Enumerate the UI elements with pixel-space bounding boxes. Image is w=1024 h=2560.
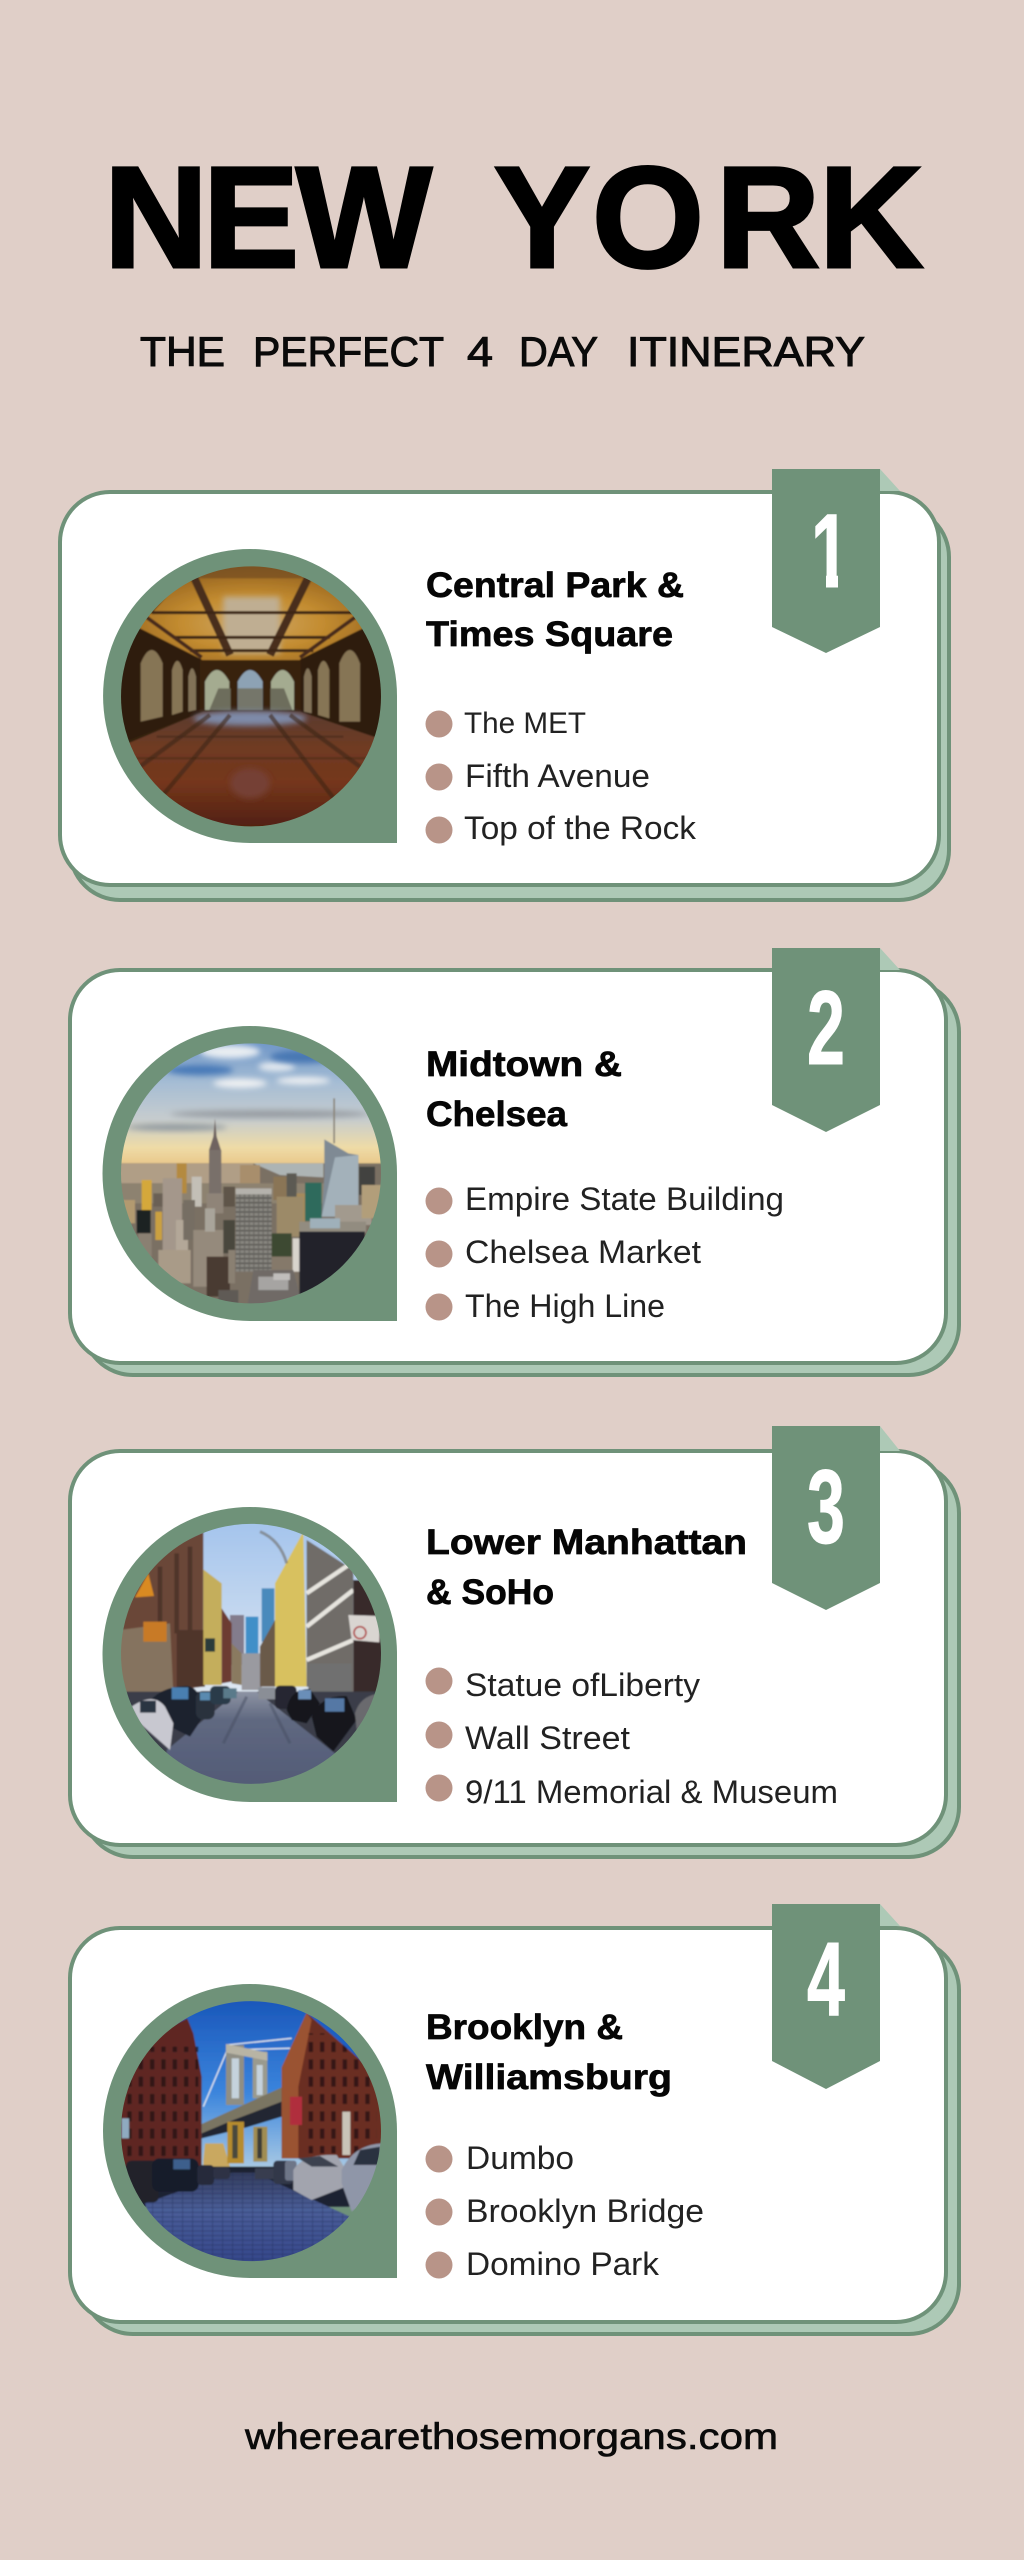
heading — [426, 566, 684, 654]
card — [70, 1451, 946, 1845]
card shadow — [83, 1940, 959, 2334]
panel: day 1 — [60, 469, 949, 900]
subtitle: DAY — [519, 328, 598, 375]
subtitle: PERFECT — [253, 328, 444, 375]
ribbon fold — [880, 1904, 900, 1926]
heading: Brooklyn & — [426, 2008, 623, 2047]
photo: Manhattan Bridge from Dumbo — [120, 2000, 383, 2265]
list: Wall Street — [465, 1720, 630, 1756]
heading: Times Square — [426, 615, 673, 654]
list: Domino Park — [466, 2246, 660, 2282]
list: Brooklyn Bridge — [466, 2193, 704, 2229]
card shadow — [83, 1463, 959, 1857]
title: NEW — [104, 137, 432, 298]
panel: day 3 — [70, 1426, 959, 1857]
heading: Lower Manhattan — [426, 1523, 747, 1562]
ribbon badge — [772, 948, 880, 1132]
photo: Bethesda Terrace arcade — [120, 563, 383, 830]
heading — [426, 2008, 672, 2097]
list — [426, 1667, 838, 1810]
list — [426, 1181, 784, 1324]
list: Top of the Rock — [464, 810, 697, 846]
heading: Williamsburg — [426, 2058, 672, 2097]
day number: 1 — [811, 492, 849, 610]
title — [104, 137, 923, 298]
heading: Central Park & — [426, 566, 684, 605]
card shadow — [70, 507, 949, 900]
title: YORK — [494, 137, 923, 298]
list: The High Line — [465, 1288, 665, 1324]
list — [426, 2140, 704, 2282]
ribbon fold — [880, 948, 900, 970]
list: Empire State Building — [465, 1181, 784, 1217]
heading: & SoHo — [426, 1573, 554, 1612]
subtitle: 4 — [467, 328, 493, 375]
footer website: wherearethosemorgans.com — [244, 2416, 778, 2457]
heading — [426, 1045, 622, 1134]
list: Dumbo — [466, 2140, 574, 2176]
heading — [426, 1523, 747, 1612]
panel: day 2 — [70, 948, 959, 1375]
day number: 3 — [807, 1448, 845, 1566]
number foot mask — [808, 575, 856, 592]
list: Chelsea Market — [465, 1234, 701, 1270]
ribbon badge — [772, 1426, 880, 1610]
photo: SoHo street — [120, 1522, 383, 1788]
heading: Chelsea — [426, 1095, 568, 1134]
panel: day 4 — [70, 1904, 959, 2334]
card — [70, 970, 946, 1363]
list: Statue ofLiberty — [465, 1667, 700, 1703]
card shadow — [83, 982, 959, 1375]
subtitle: ITINERARY — [627, 328, 865, 375]
list: The MET — [464, 707, 586, 740]
card — [60, 492, 939, 885]
subtitle — [140, 328, 865, 375]
subtitle: THE — [140, 328, 225, 375]
photo frame — [103, 1026, 397, 1321]
photo: Midtown skyline — [120, 1043, 383, 1310]
list — [426, 707, 697, 846]
ribbon badge — [772, 469, 880, 653]
list: Fifth Avenue — [465, 758, 650, 794]
card — [70, 1928, 946, 2322]
list: 9/11 Memorial & Museum — [465, 1774, 838, 1810]
photo frame — [103, 549, 397, 843]
ribbon fold — [880, 469, 900, 491]
day number: 2 — [807, 969, 845, 1087]
ribbon badge — [772, 1904, 880, 2089]
photo frame — [103, 1984, 397, 2278]
ribbon fold — [880, 1426, 900, 1451]
photo frame — [103, 1507, 397, 1802]
day number: 4 — [807, 1920, 845, 2038]
heading: Midtown & — [426, 1045, 622, 1084]
